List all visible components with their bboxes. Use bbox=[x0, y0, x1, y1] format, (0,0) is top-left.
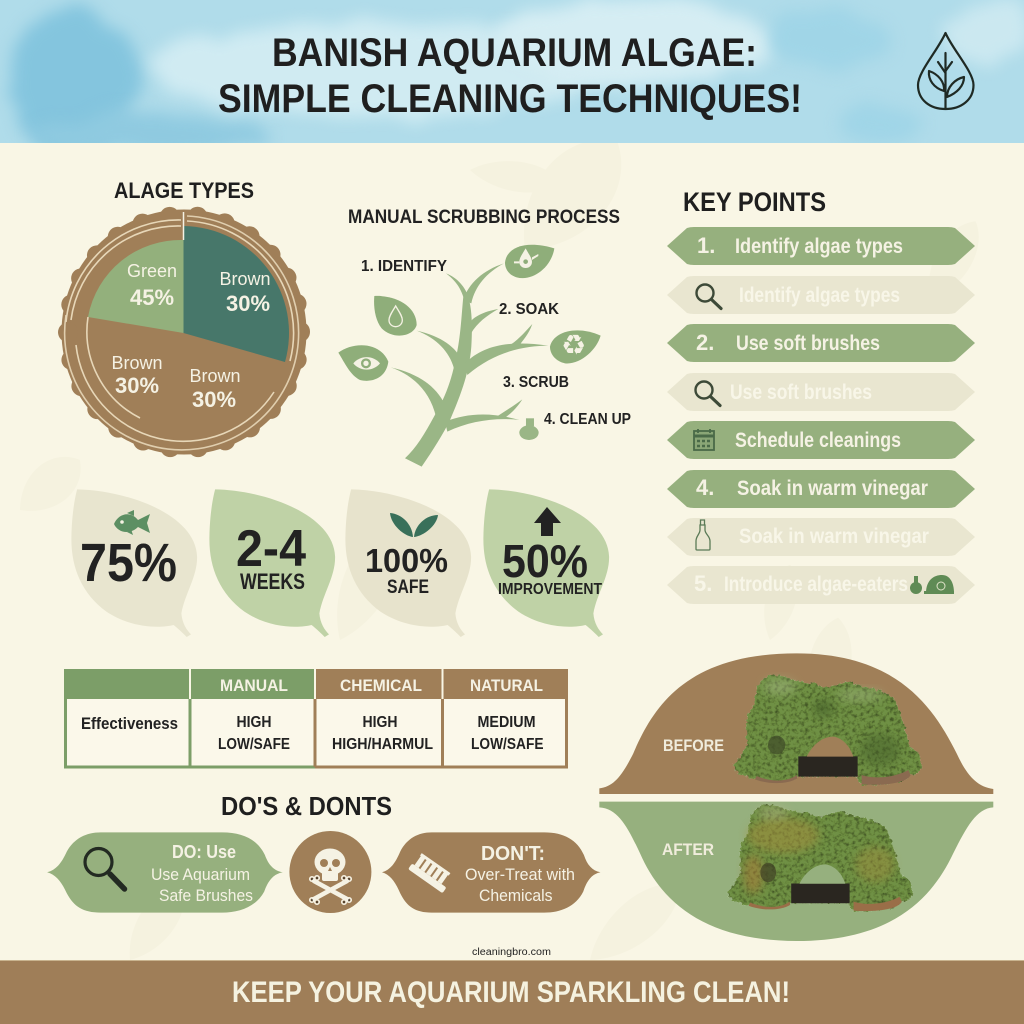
ribbon 5 bbox=[667, 421, 975, 459]
comparison table: LOW/SAFE bbox=[471, 736, 544, 753]
step labels: 4. CLEAN UP bbox=[544, 411, 631, 428]
step labels: 1. IDENTIFY bbox=[361, 258, 447, 275]
comparison table bbox=[64, 669, 568, 767]
stat: 50% improvement: 50% bbox=[502, 535, 588, 587]
ribbon 7 bbox=[667, 518, 975, 556]
do badge: Safe Brushes bbox=[159, 886, 253, 905]
panel: key points bbox=[667, 187, 975, 604]
ribbon 4 bbox=[667, 373, 975, 411]
don't badge: Over-Treat with bbox=[465, 865, 575, 884]
tree diagram bbox=[338, 245, 601, 467]
icon: leaf with recycle symbol bbox=[550, 329, 601, 363]
pie chart: 45% bbox=[130, 285, 174, 310]
ribbon 4: Use soft brushes bbox=[730, 381, 872, 404]
icon: leaf with drop bbox=[505, 245, 554, 278]
icon: snail bbox=[910, 575, 954, 594]
after rock bbox=[727, 804, 913, 911]
ribbon 8 bbox=[667, 566, 975, 604]
icon: drop with plant bbox=[918, 33, 974, 109]
before leaf bbox=[599, 653, 993, 794]
stat: 2-4 weeks: WEEKS bbox=[240, 569, 305, 594]
ribbon 1: Identify algae types bbox=[735, 235, 903, 258]
panel: before and after bbox=[599, 653, 993, 941]
ribbon 2 bbox=[667, 276, 975, 314]
heading: process: MANUAL SCRUBBING PROCESS bbox=[348, 207, 620, 228]
pie chart: Brown bbox=[111, 353, 163, 373]
comparison table: HIGH bbox=[236, 714, 272, 731]
comparison table: LOW/SAFE bbox=[218, 736, 290, 753]
ribbon 1: 1. bbox=[697, 233, 715, 258]
ribbon 1 bbox=[667, 227, 975, 265]
ribbon 3: Use soft brushes bbox=[736, 332, 880, 355]
ribbon 3: 2. bbox=[696, 330, 714, 355]
icon: up arrow bbox=[534, 507, 561, 536]
title: SIMPLE CLEANING TECHNIQUES! bbox=[218, 77, 802, 121]
heading: algae types: ALAGE TYPES bbox=[114, 178, 254, 203]
icon: fish bbox=[114, 510, 150, 535]
before leaf: BEFORE bbox=[663, 736, 724, 755]
ribbon 5: Schedule cleanings bbox=[735, 429, 901, 452]
pie chart: 30% bbox=[115, 373, 159, 398]
don't badge: Chemicals bbox=[479, 886, 552, 905]
pie chart: Brown bbox=[219, 269, 271, 289]
heading: do's and don'ts: DO'S & DONTS bbox=[221, 791, 392, 821]
comparison table: CHEMICAL bbox=[340, 676, 422, 695]
step labels: 3. SCRUB bbox=[503, 374, 569, 391]
icon: leaves bbox=[390, 513, 438, 537]
before rock bbox=[733, 675, 922, 785]
stat: 100% safe bbox=[345, 489, 471, 637]
ribbon 6: Soak in warm vinegar bbox=[737, 477, 928, 500]
stat: 50% improvement: IMPROVEMENT bbox=[498, 581, 602, 598]
pie chart: Brown bbox=[189, 366, 241, 386]
comparison table: Effectiveness bbox=[81, 714, 178, 733]
icon: bottle bbox=[696, 520, 710, 550]
don't badge: DON'T: bbox=[481, 843, 545, 865]
stat: 100% safe: SAFE bbox=[387, 577, 429, 598]
panel: manual scrubbing process bbox=[338, 207, 631, 467]
step labels bbox=[361, 258, 631, 428]
title bbox=[218, 31, 802, 121]
source credit: cleaningbro.com bbox=[472, 947, 551, 958]
stat: 2-4 weeks: 2-4 bbox=[236, 520, 306, 578]
icon: leaf with eye bbox=[338, 345, 388, 381]
panel: algae types bbox=[62, 178, 306, 454]
icon: leaf with recycle symbol: ♻ bbox=[561, 329, 586, 362]
comparison table: NATURAL bbox=[470, 676, 543, 695]
warning circle: skull and crossbones bbox=[289, 831, 371, 913]
do badge: Use Aquarium bbox=[151, 865, 250, 884]
comparison table: MANUAL bbox=[220, 676, 288, 695]
ribbon 8: Introduce algae-eaters bbox=[724, 573, 908, 596]
after leaf: AFTER bbox=[662, 840, 714, 859]
stat: 2-4 weeks bbox=[209, 489, 335, 637]
icon: leaf with water drop bbox=[374, 296, 417, 336]
pie chart: Green bbox=[127, 261, 177, 281]
after leaf bbox=[599, 802, 993, 941]
comparison table: HIGH/HARMUL bbox=[332, 736, 433, 753]
comparison table: MEDIUM bbox=[478, 714, 536, 731]
footer banner: KEEP YOUR AQUARIUM SPARKLING CLEAN! bbox=[232, 976, 790, 1009]
title: BANISH AQUARIUM ALGAE: bbox=[272, 31, 757, 75]
ribbon 6: 4. bbox=[696, 475, 714, 500]
step labels: 2. SOAK bbox=[499, 301, 559, 318]
stat: 75% bbox=[71, 489, 197, 637]
header banner bbox=[0, 0, 1024, 143]
comparison table: HIGH bbox=[362, 714, 398, 731]
do badge: DO: Use bbox=[172, 842, 236, 862]
ribbon 6 bbox=[667, 470, 975, 508]
stat: 100% safe: 100% bbox=[365, 542, 448, 579]
footer banner bbox=[0, 960, 1024, 1024]
heading: key points: KEY POINTS bbox=[683, 187, 826, 217]
stat: 50% improvement bbox=[483, 489, 609, 637]
ribbon 3 bbox=[667, 324, 975, 362]
pie chart: 30% bbox=[226, 291, 270, 316]
pie chart bbox=[62, 210, 306, 454]
icon: magnifier bbox=[85, 848, 124, 889]
icon: calendar bbox=[694, 429, 714, 450]
panel: stat leaves bbox=[71, 489, 609, 637]
ribbon 8: 5. bbox=[694, 571, 712, 596]
ribbon 7: Soak in warm vinegar bbox=[739, 525, 929, 548]
don't badge bbox=[382, 832, 600, 913]
icon: brush bbox=[408, 852, 455, 893]
pie chart: 30% bbox=[192, 387, 236, 412]
ribbon 2: Identify algae types bbox=[739, 284, 900, 307]
do badge bbox=[47, 832, 283, 913]
panel: do's and don'ts bbox=[47, 791, 600, 913]
stat: 75%: 75% bbox=[80, 533, 177, 593]
